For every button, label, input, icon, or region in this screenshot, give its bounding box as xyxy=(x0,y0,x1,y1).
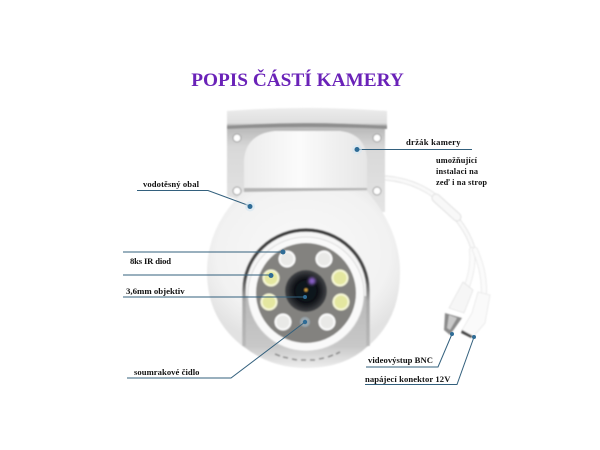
label: vodotěsný obal: vodotěsný obal xyxy=(143,179,200,189)
label: videovýstup BNC: videovýstup BNC xyxy=(368,355,433,365)
label: napájecí konektor 12V: napájecí konektor 12V xyxy=(365,374,451,384)
label: soumrakové čidlo xyxy=(127,320,307,378)
camera illustration xyxy=(207,108,490,368)
grey face xyxy=(256,243,356,343)
yellow LEDs xyxy=(262,270,348,310)
lower chin xyxy=(243,296,369,368)
label: napájecí konektor 12V xyxy=(365,335,476,384)
white LEDs xyxy=(276,252,334,330)
label: soumrakové čidlo: soumrakové čidlo xyxy=(134,367,200,377)
chin vent slots xyxy=(275,352,340,360)
label: držák kamery: držák kamery xyxy=(406,137,461,147)
dusk sensor xyxy=(300,317,310,327)
connector: 12V power xyxy=(461,292,490,338)
label: 3,6mm objektiv: 3,6mm objektiv xyxy=(126,286,185,296)
label: 8ks IR diod xyxy=(123,250,286,278)
title: POPIS ČÁSTÍ KAMERY xyxy=(191,69,404,91)
bracket xyxy=(227,108,387,212)
label: 3,6mm objektiv xyxy=(123,286,307,299)
lens xyxy=(285,270,327,312)
cable xyxy=(386,178,484,292)
label: 8ks IR diod: 8ks IR diod xyxy=(130,256,171,266)
label: videovýstup BNC xyxy=(366,332,454,367)
note: mounting xyxy=(436,156,487,187)
label: vodotěsný obal xyxy=(137,179,255,212)
note: mounting: zeď i na strop xyxy=(436,178,487,187)
dome xyxy=(244,131,367,190)
note: mounting: instalaci na xyxy=(436,167,479,176)
dark band xyxy=(244,230,368,346)
connector: BNC video output xyxy=(444,282,473,335)
ball housing xyxy=(207,187,400,348)
label: držák kamery xyxy=(352,137,472,154)
white ring xyxy=(248,237,364,351)
note: mounting: umožňující xyxy=(436,156,478,165)
